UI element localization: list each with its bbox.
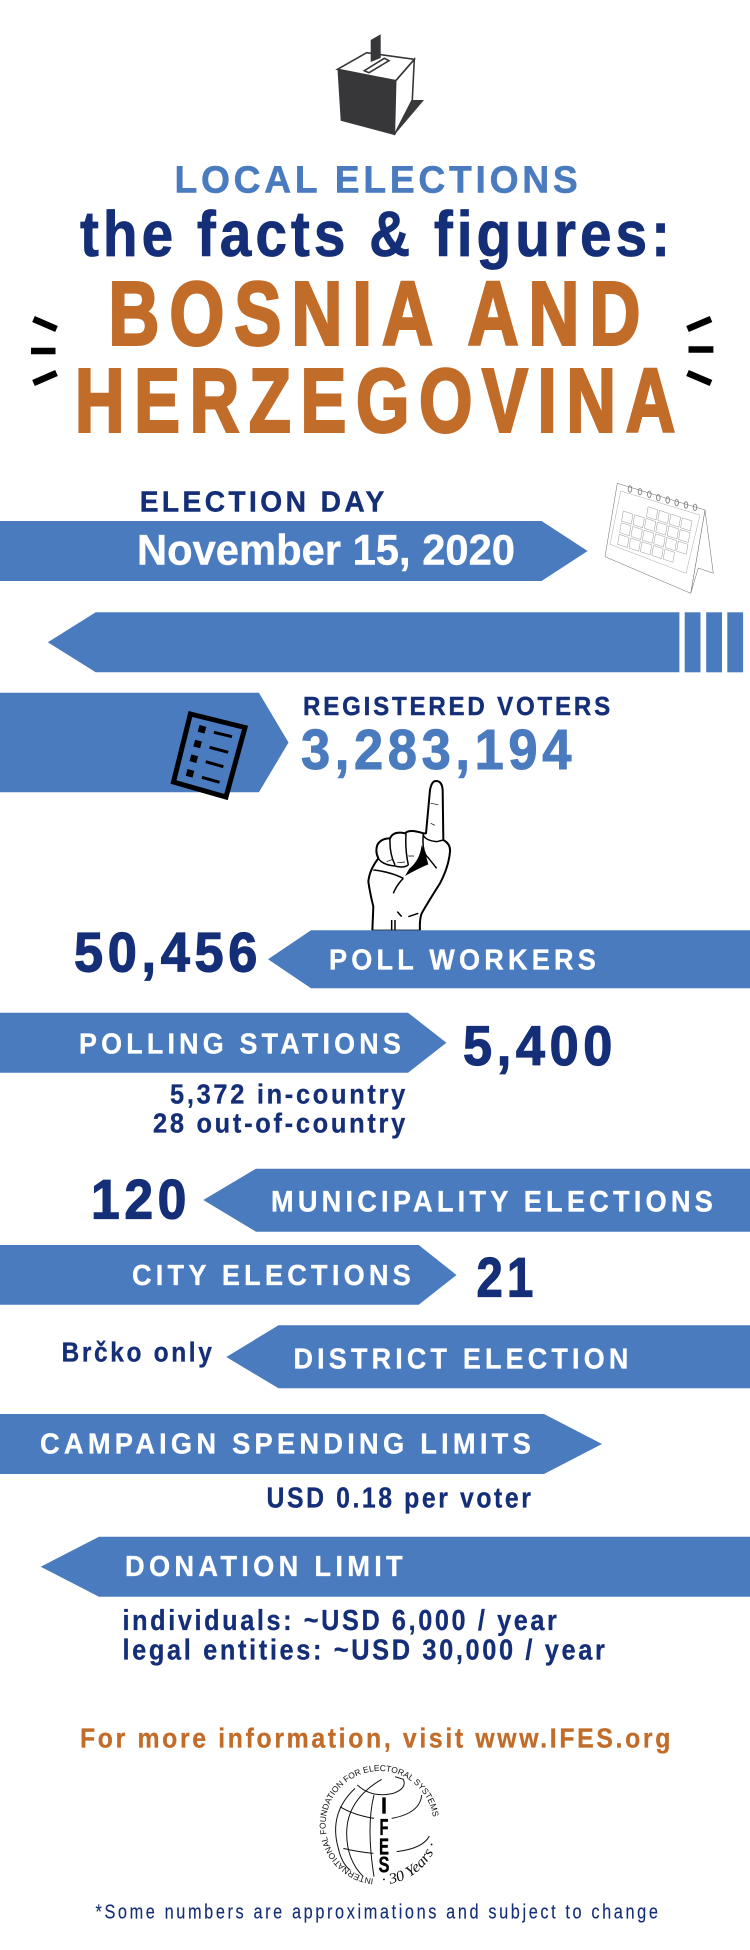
number: registered voters: 3,283,194 — [301, 718, 576, 782]
number: poll workers: 50,456 — [74, 921, 262, 984]
banner: election date — [0, 521, 588, 581]
icon: ballot paper checklist — [174, 714, 245, 797]
text: polling station breakdown — [153, 1078, 408, 1138]
city elections label: CITY ELECTIONS — [132, 1260, 415, 1292]
icon: desk calendar — [605, 483, 713, 593]
heading: local elections: LOCAL ELECTIONS — [174, 160, 582, 202]
polling stations label: POLLING STATIONS — [79, 1028, 405, 1060]
banner: donation limit — [41, 1537, 750, 1597]
text: spending per voter: USD 0.18 per voter — [266, 1482, 534, 1514]
number: city elections: 21 — [476, 1246, 538, 1309]
logo: IFES globe: · 30 Years · — [383, 1844, 432, 1884]
logo: IFES globe: F — [380, 1814, 389, 1840]
campaign spending limits label: CAMPAIGN SPENDING LIMITS — [40, 1428, 535, 1460]
number: polling stations: 5,400 — [463, 1014, 617, 1077]
banner: poll workers — [268, 930, 750, 988]
municipality elections label: MUNICIPALITY ELECTIONS — [271, 1186, 717, 1219]
banner: district election — [226, 1325, 750, 1388]
donation limit label: DONATION LIMIT — [125, 1551, 407, 1583]
label: election day: ELECTION DAY — [140, 487, 388, 519]
heading: the facts and figures: the facts & figures: — [80, 198, 674, 270]
number: municipality elections: 120 — [91, 1167, 191, 1230]
banner: municipality elections — [203, 1169, 750, 1232]
text: donation limit details — [122, 1605, 608, 1666]
text: donation limit details: individuals: ~USD 6,000 / year — [122, 1605, 560, 1637]
label: registered voters: REGISTERED VOTERS — [303, 693, 613, 721]
banner: registered voters arrow — [0, 693, 288, 792]
icon: left emphasis ticks — [31, 319, 56, 383]
banner: polling stations — [0, 1013, 446, 1073]
district election label: DISTRICT ELECTION — [294, 1343, 632, 1375]
text: Brcko only: Brčko only — [62, 1337, 214, 1368]
banner: city elections — [0, 1245, 456, 1305]
banner: campaign spending limits — [0, 1414, 602, 1474]
date text: November 15, 2020 — [137, 526, 515, 574]
text: polling station breakdown: 28 out-of-country — [153, 1107, 408, 1138]
icon: raised index finger hand — [368, 781, 450, 931]
logo: IFES globe: S — [378, 1852, 390, 1878]
logo: IFES globe: INTERNATIONAL FOUNDATION FOR ELECTORAL SYSTEMS — [320, 1765, 438, 1884]
poll workers label: POLL WORKERS — [329, 944, 600, 976]
logo: IFES globe: E — [379, 1833, 389, 1859]
icon: right emphasis ticks — [688, 319, 713, 383]
text: donation limit details: legal entities: ~USD 30,000 / year — [122, 1634, 608, 1666]
logo: IFES globe: I — [381, 1792, 387, 1818]
banner: pencil arrow with stripes — [48, 612, 743, 672]
text: more information link: For more information, visit www.IFES.org — [80, 1722, 673, 1753]
icon: ballot box — [338, 34, 424, 135]
text: polling station breakdown: 5,372 in-country — [170, 1078, 408, 1109]
